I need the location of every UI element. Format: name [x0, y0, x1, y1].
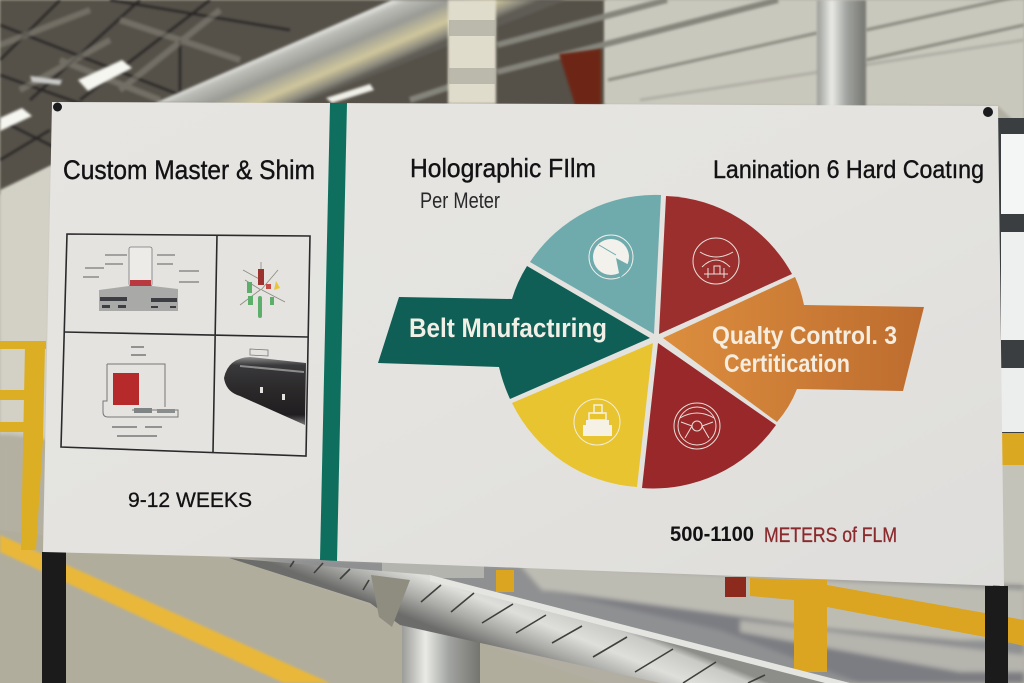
- icon: yellow stacked machine: [574, 399, 620, 445]
- icon: red bottom wheel: [674, 403, 720, 449]
- heading: holographic film: Holographic FIlm: [410, 153, 596, 183]
- right yellow rail: [1000, 433, 1024, 465]
- heading: lamination and hard coating: Lanination 6 Hard Coatıng: [713, 156, 984, 184]
- sign board: [43, 102, 1004, 586]
- wedge: teal: [530, 195, 661, 334]
- silver rail: [229, 558, 850, 683]
- wedge and arrow: green with belt manufacturing label: [378, 266, 650, 399]
- post right: [985, 575, 1008, 683]
- red stand: [725, 577, 746, 597]
- label: quality control: Qualty Control. 3: [712, 322, 897, 350]
- wedge: red top: [659, 196, 792, 334]
- center post: [382, 560, 484, 683]
- post left: [42, 541, 66, 683]
- back wall: [604, 0, 1024, 130]
- window right: [998, 118, 1024, 438]
- subheading: per meter: Per Meter: [420, 188, 500, 213]
- volume label: 500-1100: [670, 523, 754, 546]
- label: certification: Certitication: [724, 350, 850, 378]
- screw right: [983, 107, 993, 117]
- floor: [0, 432, 440, 683]
- ceiling lights: [0, 60, 374, 131]
- wedge: yellow: [512, 343, 653, 487]
- bracket: [371, 575, 410, 627]
- diagram: red block schematic: [103, 347, 178, 436]
- wedge: red bottom: [642, 343, 776, 488]
- weeks label: 9-12 WEEKS: [128, 489, 252, 512]
- yellow railing left: [0, 341, 46, 550]
- floor yellow line: [0, 535, 330, 683]
- diagram: black drum: [224, 349, 306, 425]
- volume unit label: METERS of FLM: [764, 524, 897, 547]
- pie chart: [378, 195, 924, 488]
- left wall: [0, 165, 52, 440]
- overhead steel bars: [410, 0, 778, 100]
- heading: custom master and shim: Custom Master & Shim: [63, 155, 315, 185]
- silver duct: [155, 0, 566, 105]
- yellow railing right: [496, 570, 1024, 672]
- screw left: [53, 102, 62, 112]
- red banner: [559, 49, 601, 105]
- diagram: radial parts: [240, 262, 285, 318]
- white column: [448, 0, 496, 104]
- green divider band: [320, 103, 347, 561]
- diagram grid: [61, 234, 310, 456]
- icon: teal disc: [589, 235, 633, 279]
- ceiling: [0, 0, 606, 195]
- lower right background: [235, 555, 1024, 683]
- metal duct vertical: [817, 0, 866, 107]
- label: belt manufacturing: Belt Mnufactıring: [409, 313, 607, 343]
- diagram: machine cross-section: [83, 247, 199, 311]
- icon: red top machine: [693, 238, 739, 284]
- wedge and arrow: orange with quality control label: [663, 277, 924, 422]
